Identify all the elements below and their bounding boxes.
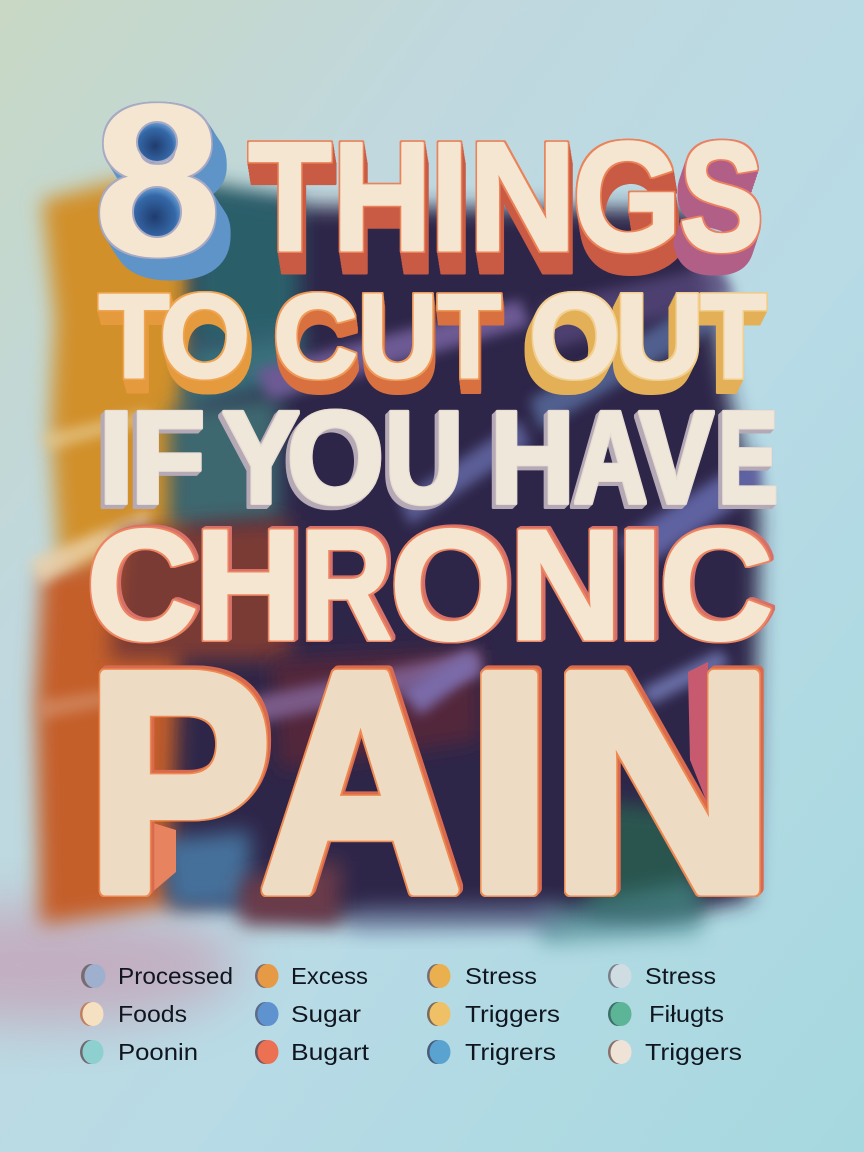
line: THINGS: N <box>468 110 576 283</box>
item: Stress <box>608 963 716 989</box>
hole: upper of 8 <box>137 122 177 162</box>
line: IF YOU HAVE: O <box>287 384 384 530</box>
line: CHRONIC: O <box>390 498 512 673</box>
line: THINGS: T <box>248 110 332 283</box>
line: IF YOU HAVE <box>99 384 778 530</box>
line: CHRONIC <box>86 498 773 673</box>
line: IF YOU HAVE: V <box>640 384 714 530</box>
line: PAIN <box>87 609 775 957</box>
line: CHRONIC: N <box>509 498 622 673</box>
line: TO CUT OUT <box>99 270 766 403</box>
line: IF YOU HAVE: F <box>131 384 205 530</box>
line: PAIN: I <box>466 609 553 957</box>
line: PAIN: A <box>260 609 461 957</box>
item: Stress: Stress <box>465 963 537 989</box>
item: Foods: Foods <box>118 1001 187 1027</box>
item: Poonin: Poonin <box>118 1039 198 1065</box>
line: IF YOU HAVE: Y <box>222 384 300 530</box>
item: Trigrers: Trigrers <box>465 1039 556 1065</box>
hole: lower of 8 <box>133 187 181 237</box>
item: Foods <box>80 1001 187 1027</box>
line: CHRONIC: C <box>86 498 198 673</box>
line: PAIN: N <box>550 609 775 957</box>
line: IF YOU HAVE: U <box>385 384 463 530</box>
line: CHRONIC: I <box>616 498 664 673</box>
item: Processed: Processed <box>118 963 233 989</box>
item: Excess: Excess <box>291 963 368 989</box>
item: Triggers: Triggers <box>645 1039 742 1065</box>
item: Fifligts: Fiługts <box>649 1001 724 1027</box>
item: Triggers <box>608 1039 742 1065</box>
item: Poonin <box>80 1039 198 1065</box>
line: CHRONIC: H <box>194 498 302 673</box>
cast shadows <box>30 180 760 945</box>
title <box>86 61 778 957</box>
item: Trigrers <box>427 1039 556 1065</box>
legend <box>80 963 742 1065</box>
item: Fifligts <box>608 1001 724 1027</box>
line: TO CUT OUT: U <box>358 270 438 403</box>
item: Bugart <box>255 1039 370 1065</box>
line: THINGS: I <box>430 110 469 283</box>
N inner side <box>688 662 708 805</box>
line: TO CUT OUT: C <box>273 270 358 403</box>
line: THINGS <box>248 110 763 283</box>
item: Excess <box>255 963 368 989</box>
item: Triggers <box>427 1001 560 1027</box>
P stem side <box>150 822 176 894</box>
line: THINGS: G <box>573 110 681 283</box>
item: Sugar <box>255 1001 361 1027</box>
item: Stress <box>427 963 537 989</box>
line: CHRONIC: C <box>659 498 773 673</box>
item: Triggers: Triggers <box>465 1001 560 1027</box>
line: TO CUT OUT: O <box>160 270 250 403</box>
line: IF YOU HAVE: H <box>490 384 575 530</box>
line: TO CUT OUT: T <box>438 270 501 403</box>
item: Bugart: Bugart <box>291 1039 370 1065</box>
line: IF YOU HAVE: E <box>718 384 778 530</box>
line: IF YOU HAVE: A <box>574 384 648 530</box>
numeral 8: 8 <box>94 61 220 300</box>
item: Sugar: Sugar <box>291 1001 361 1027</box>
line: IF YOU HAVE: I <box>99 384 134 530</box>
line: TO CUT OUT: O <box>530 270 620 403</box>
line: THINGS: H <box>332 110 432 283</box>
line: TO CUT OUT: T <box>701 270 766 403</box>
line: CHRONIC: R <box>300 498 392 673</box>
line: PAIN: P <box>87 609 271 957</box>
item: Stress: Stress <box>645 963 716 989</box>
line: TO CUT OUT: U <box>616 270 704 403</box>
line: THINGS: S <box>680 110 763 283</box>
line: TO CUT OUT: T <box>99 270 169 403</box>
